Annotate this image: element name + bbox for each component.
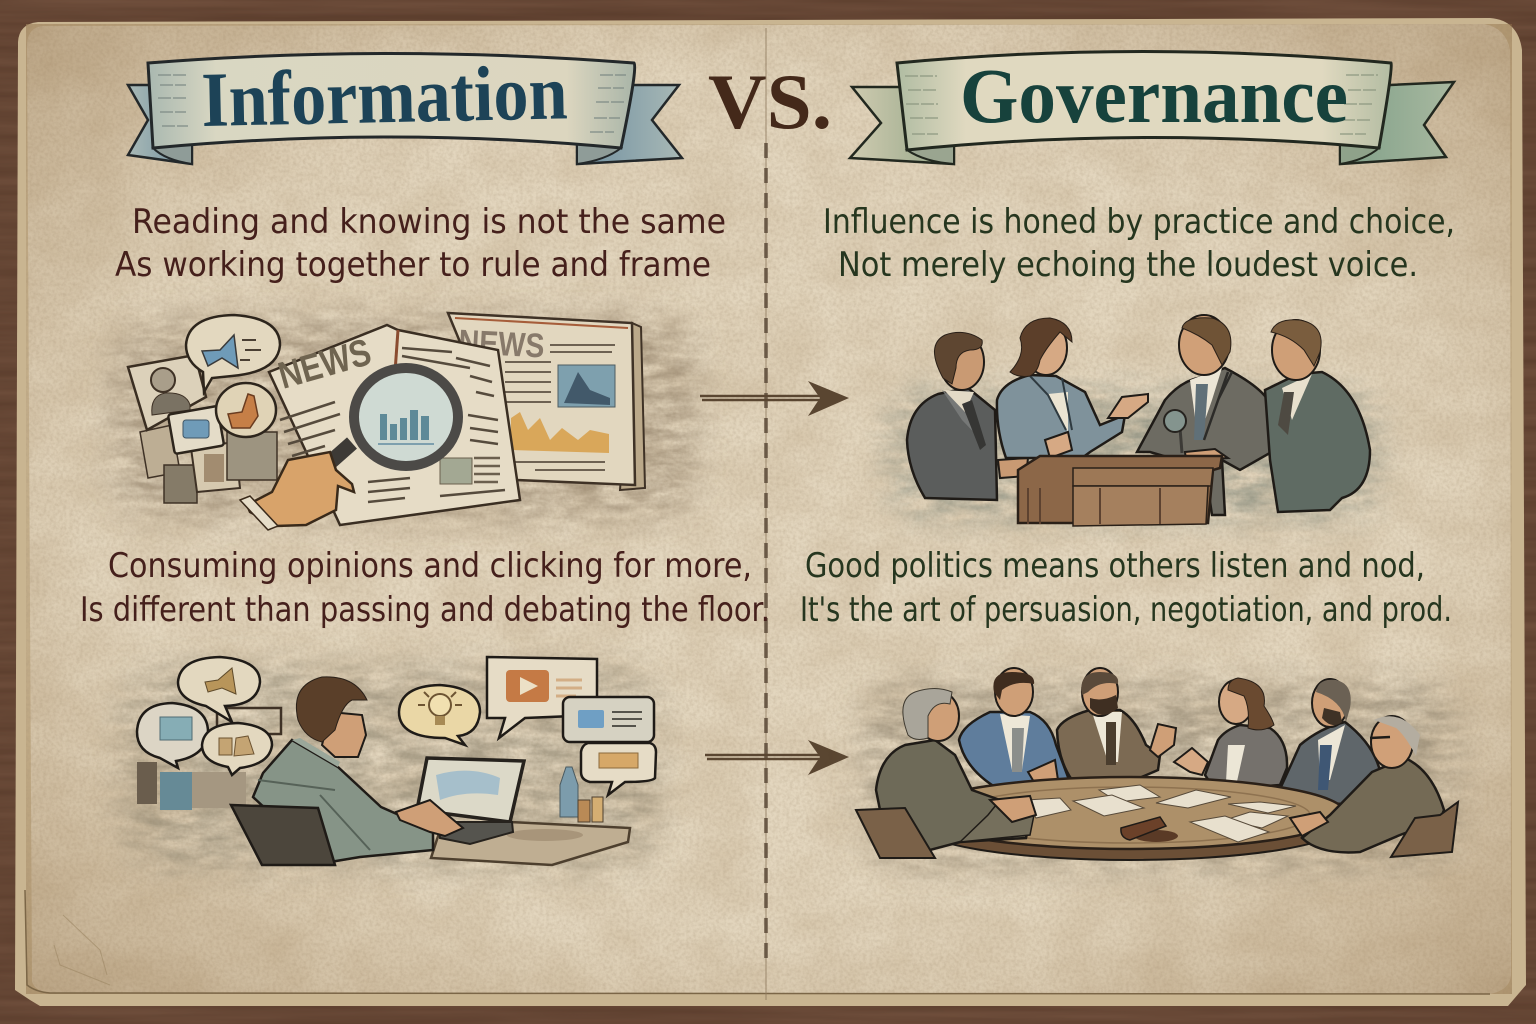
left collage cards bbox=[140, 425, 180, 478]
person 3 bbox=[1057, 668, 1176, 785]
back newspaper bbox=[448, 313, 645, 490]
papers bbox=[1026, 785, 1296, 842]
verse: governance 2: Good politics means others listen and nod, bbox=[805, 546, 1425, 586]
banner: Information bbox=[128, 48, 682, 164]
verse: governance 1: Not merely echoing the loudest voice. bbox=[838, 245, 1418, 285]
magnifier bbox=[326, 443, 352, 466]
chat bubble: screen bbox=[137, 703, 208, 768]
gavel bbox=[1121, 817, 1178, 842]
person 4 bbox=[1174, 678, 1287, 790]
laptop bbox=[417, 758, 524, 844]
bottles bbox=[560, 767, 603, 822]
man left bbox=[907, 332, 1028, 500]
verse: information 2 bbox=[80, 546, 770, 630]
chat bubble: megaphone bbox=[178, 657, 260, 722]
centre divider bbox=[765, 28, 767, 1000]
chairs bbox=[856, 808, 935, 858]
desk bbox=[431, 822, 630, 865]
illustration: newspapers and magnifying glass bbox=[110, 313, 700, 530]
person 2 bbox=[959, 668, 1071, 796]
arrow: information to governance (top) bbox=[700, 381, 849, 416]
hand bbox=[247, 452, 354, 526]
illustration: negotiators around a table bbox=[856, 668, 1460, 870]
verse: information 1: Reading and knowing is not the same bbox=[132, 202, 726, 242]
verse: information 2: Is different than passing and debating the floor. bbox=[80, 590, 770, 630]
books and shelf bbox=[137, 762, 157, 804]
chat bubble: folder bbox=[563, 697, 654, 742]
verse: governance 2 bbox=[800, 546, 1452, 630]
arrow: information to governance (bottom) bbox=[705, 740, 849, 775]
verse: governance 1 bbox=[823, 202, 1455, 285]
main newspaper bbox=[269, 325, 520, 525]
chat bubble: lightbulb bbox=[399, 685, 480, 745]
heading: Governance: Governance bbox=[960, 52, 1348, 139]
back newspaper: NEWS bbox=[458, 323, 545, 365]
table bbox=[915, 777, 1345, 860]
person 1 bbox=[876, 688, 1036, 850]
man far right bbox=[1265, 320, 1370, 512]
banner: Governance bbox=[850, 52, 1454, 164]
illustration: newspapers and magnifying glass: NEWS bbox=[274, 331, 376, 398]
chat bubble: camera bbox=[202, 723, 272, 775]
microphone bbox=[1180, 428, 1182, 453]
verse: information 1 bbox=[115, 202, 726, 285]
verse: information 1: As working together to rule and frame bbox=[115, 245, 711, 285]
verse: information 2: Consuming opinions and clicking for more, bbox=[108, 546, 752, 586]
man right centre bbox=[1137, 315, 1275, 515]
illustration: man at laptop with chat bubbles bbox=[120, 657, 660, 870]
heading: VS.: VS. bbox=[708, 58, 832, 145]
chat bubble: video bbox=[487, 657, 597, 738]
chair bbox=[231, 805, 335, 865]
podium bbox=[1018, 456, 1222, 526]
chat bubble: tan folder bbox=[581, 743, 656, 795]
person 5 bbox=[1275, 679, 1381, 805]
person 6 bbox=[1290, 716, 1444, 852]
woman bbox=[997, 318, 1148, 458]
verse: governance 1: Influence is honed by practice and choice, bbox=[823, 202, 1455, 242]
illustration: politicians at a podium bbox=[890, 315, 1380, 526]
heading: Information: Information bbox=[201, 48, 568, 143]
man bbox=[253, 677, 463, 863]
